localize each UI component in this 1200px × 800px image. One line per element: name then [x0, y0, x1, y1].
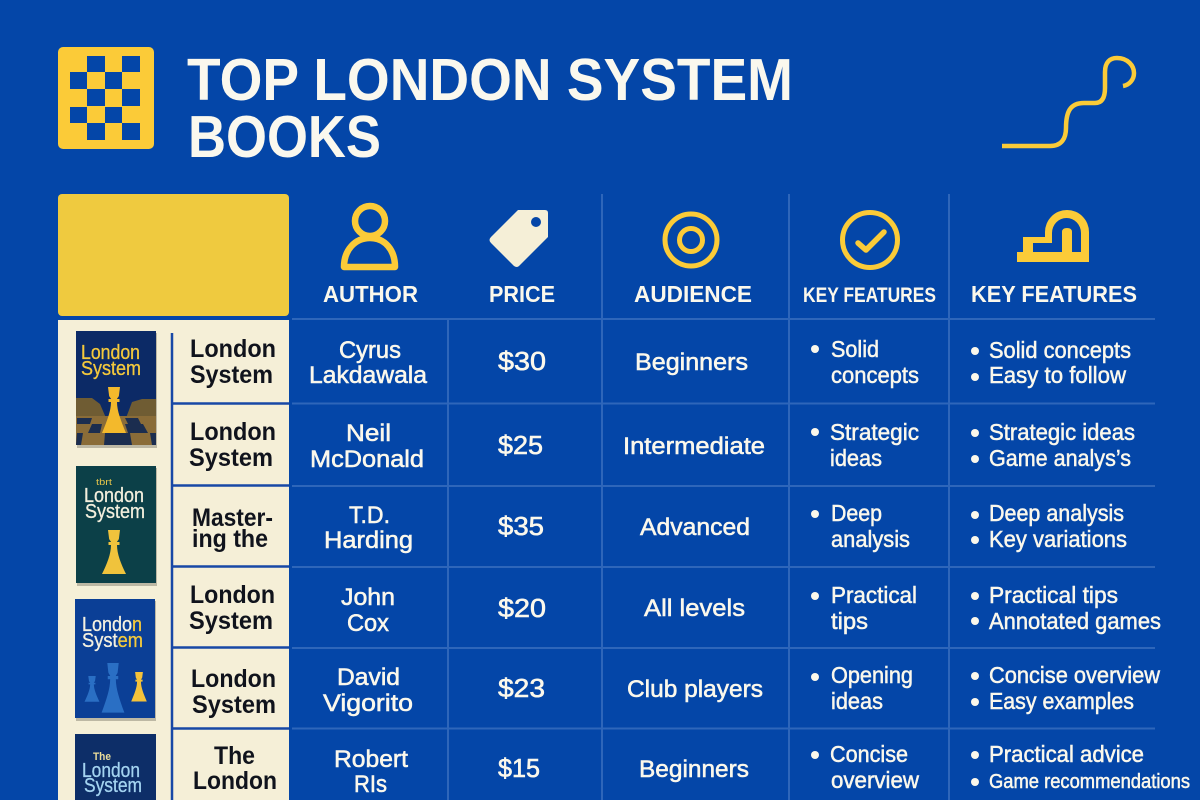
logo: chessboard icon	[58, 47, 154, 149]
book title cells	[189, 335, 277, 795]
book cover 4: System	[84, 775, 142, 797]
book title cells: London	[190, 335, 276, 363]
book cover 2: System	[85, 501, 145, 523]
book cover 3: London	[82, 614, 142, 636]
column header: audience	[634, 214, 752, 307]
column: audiences: Club players	[627, 676, 763, 703]
book cover 1: System	[81, 358, 141, 380]
column header: key features 2: KEY FEATURES	[971, 281, 1137, 307]
column: key features short list: tips	[831, 608, 868, 634]
book title cells: ing the	[192, 525, 268, 553]
column: authors: John	[341, 584, 395, 611]
column: key features detailed list: Game analys’s	[989, 445, 1131, 471]
column header: author: AUTHOR	[323, 281, 418, 307]
book cover 1	[76, 331, 157, 448]
book cover 2: tbrt	[96, 477, 113, 487]
column: authors: Harding	[324, 527, 413, 554]
column header: price	[489, 210, 555, 307]
column: key features short list	[811, 336, 919, 793]
column: prices: $25	[498, 430, 543, 460]
book cover 3: System	[82, 630, 143, 652]
column: authors: McDonald	[310, 446, 424, 473]
title	[187, 47, 793, 170]
column: key features short list: Opening	[831, 662, 913, 688]
title: TOP LONDON SYSTEM	[187, 47, 793, 113]
book title cells: Master-	[192, 504, 273, 532]
book cover 4: The	[93, 751, 111, 763]
column header: author	[323, 206, 418, 307]
column: key features short list: ideas	[831, 688, 883, 714]
column: authors: RIs	[354, 771, 387, 798]
book title cells: System	[190, 361, 273, 389]
title: BOOKS	[188, 104, 381, 170]
column header: key features 1	[803, 212, 936, 307]
column header: key features 2	[971, 210, 1137, 307]
column: authors: Robert	[334, 746, 408, 773]
panel: book titles and covers	[58, 320, 289, 800]
column header: audience: AUDIENCE	[634, 281, 752, 307]
column: key features detailed list: Strategic ideas	[989, 419, 1135, 445]
column: key features detailed list: Practical advice	[989, 741, 1144, 767]
column: key features detailed list: Easy examples	[989, 688, 1134, 714]
column: key features short list: ideas	[830, 445, 882, 471]
column: authors: Vigorito	[323, 690, 413, 717]
book cover 4: London	[82, 760, 140, 782]
column: audiences	[623, 349, 765, 783]
column: key features detailed list: Deep analysis	[989, 500, 1124, 526]
column: audiences: Intermediate	[623, 433, 765, 460]
column: key features detailed list	[971, 337, 1190, 793]
book title cells: London	[190, 418, 276, 446]
column: authors: Lakdawala	[309, 362, 428, 389]
table grid	[292, 194, 1155, 800]
column: authors: T.D.	[349, 502, 390, 529]
book title cells: System	[192, 691, 276, 719]
column: key features short list: Deep	[831, 500, 882, 526]
book title cells: London	[190, 581, 275, 609]
column: prices: $35	[498, 511, 544, 541]
book cover 1: London	[81, 342, 140, 364]
column: prices	[498, 346, 546, 783]
column: authors: Cox	[347, 610, 389, 637]
column: prices: $15	[498, 753, 540, 783]
column header: price: PRICE	[489, 281, 555, 307]
column: prices: $20	[498, 593, 546, 623]
column: key features short list: concepts	[831, 362, 919, 388]
column: prices: $23	[498, 673, 545, 703]
column: audiences: Advanced	[640, 514, 750, 541]
column: audiences: Beginners	[635, 349, 748, 376]
book cover 2	[76, 466, 157, 586]
column: authors: Cyrus	[339, 337, 401, 364]
column: key features short list: Strategic	[830, 419, 919, 445]
column: key features detailed list: Concise overview	[989, 662, 1160, 688]
column: key features short list: Solid	[831, 336, 879, 362]
panel: yellow header block	[58, 194, 289, 316]
column: key features short list: Practical	[831, 582, 917, 608]
column header: key features 1: KEY FEATURES	[803, 284, 936, 307]
column: prices: $30	[498, 346, 546, 376]
book title cells: London	[191, 665, 276, 693]
column: key features detailed list: Solid concepts	[989, 337, 1131, 363]
column: key features short list: analysis	[831, 526, 910, 552]
column: authors: Neil	[346, 420, 391, 447]
book title cells: System	[189, 607, 273, 635]
book cover 2: London	[84, 485, 144, 507]
column: authors: David	[337, 664, 400, 691]
icon: squiggle path	[1002, 58, 1134, 146]
column: key features detailed list: Practical tips	[989, 582, 1118, 608]
column: audiences: All levels	[644, 595, 745, 622]
book cover 3	[75, 599, 156, 721]
book cover 4	[75, 734, 156, 800]
column: key features detailed list: Easy to follow	[989, 362, 1126, 388]
book title cells: The	[214, 742, 255, 770]
book title cells: System	[189, 444, 273, 472]
column: audiences: Beginners	[639, 756, 749, 783]
column: key features short list: overview	[831, 767, 919, 793]
column: authors	[309, 337, 428, 798]
column: key features detailed list: Key variations	[989, 526, 1127, 552]
column: key features detailed list: Annotated games	[989, 608, 1161, 634]
column: key features short list: Concise	[830, 741, 908, 767]
book title cells: London	[193, 767, 277, 795]
